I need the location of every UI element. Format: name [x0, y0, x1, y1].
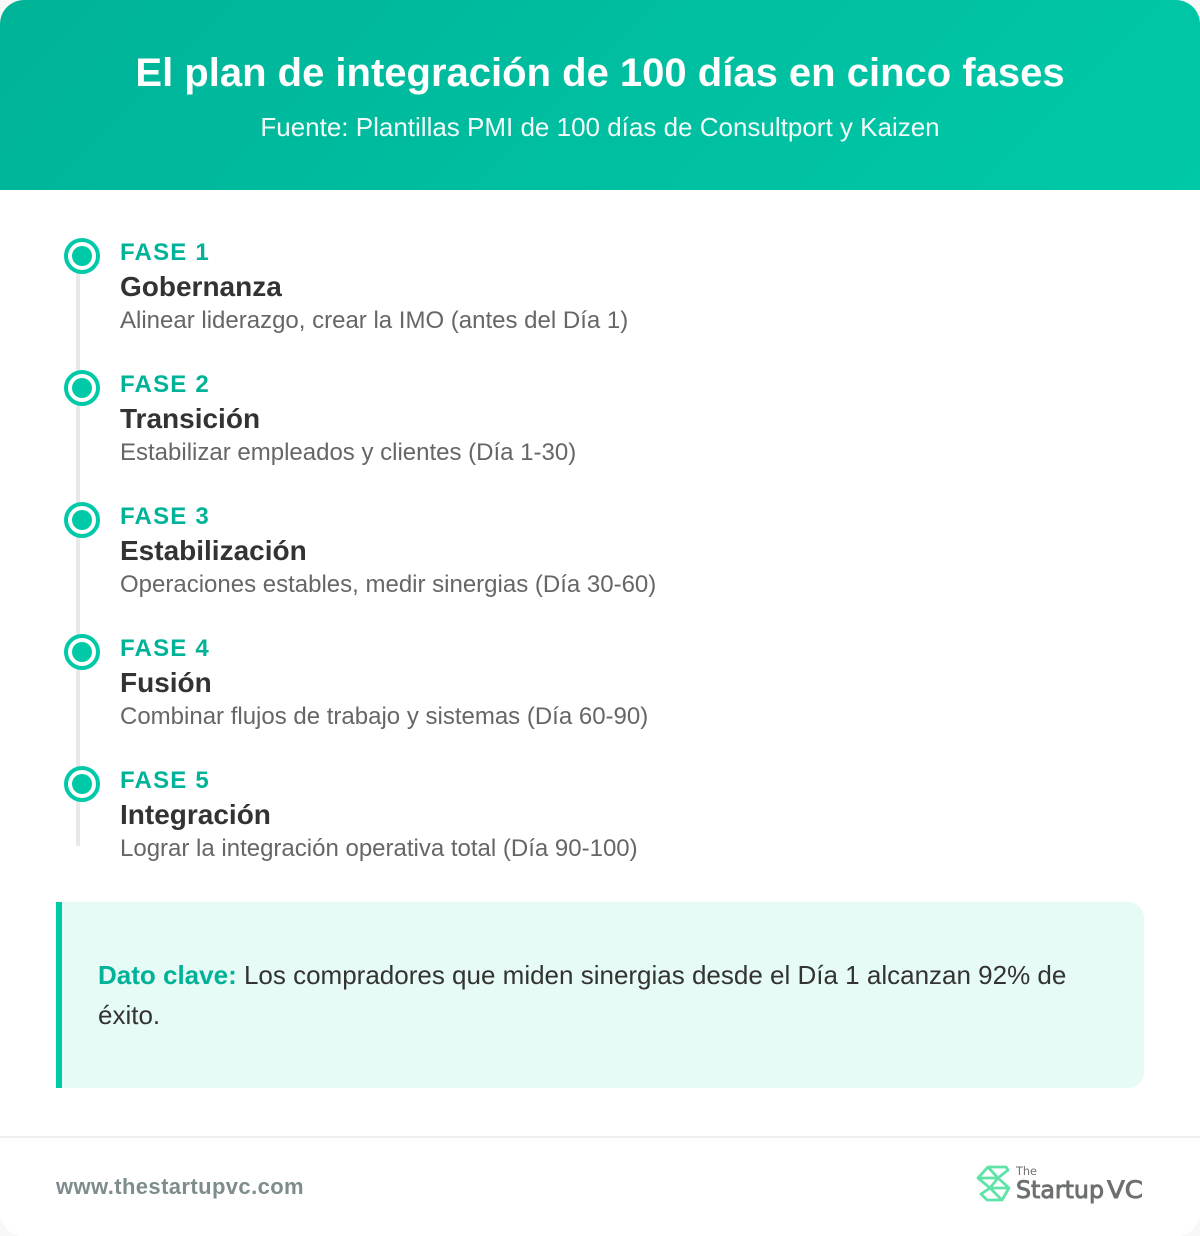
logo wordmark: VC	[1107, 1176, 1143, 1204]
logo wordmark: Startup	[1016, 1176, 1104, 1204]
title: El plan de integración de 100 días en cinco fases	[135, 51, 1065, 95]
phase 5 label: FASE 5	[120, 767, 210, 794]
source subtitle: Fuente: Plantillas PMI de 100 días de Consultport y Kaizen	[260, 112, 940, 142]
phase 1 description: Alinear liderazgo, crear la IMO (antes del Día 1)	[120, 307, 628, 334]
phase 3 name: Estabilización	[120, 535, 307, 566]
callout: key fact	[56, 902, 1144, 1088]
icon: timeline dot 2	[64, 370, 100, 406]
logo wordmark: The	[1015, 1164, 1037, 1178]
logo: The Startup VC	[976, 1164, 1143, 1204]
icon: timeline dot 3	[64, 502, 100, 538]
callout: key fact: Dato clave: Los compradores que miden sinergias desde el Día 1 alcanzan 92% de éxito.	[98, 960, 1066, 1030]
phase 1 label: FASE 1	[120, 239, 210, 266]
phase 2	[64, 370, 576, 466]
phase 3 label: FASE 3	[120, 503, 210, 530]
phase 4 label: FASE 4	[120, 635, 210, 662]
icon: timeline dot 1	[64, 238, 100, 274]
logo wordmark	[1015, 1164, 1143, 1204]
phase 4 description: Combinar flujos de trabajo y sistemas (Día 60-90)	[120, 703, 648, 730]
phase 4	[64, 634, 648, 730]
website url: www.thestartupvc.com	[56, 1174, 304, 1199]
phase 5	[64, 766, 638, 862]
phase 3	[64, 502, 656, 598]
timeline connector line	[76, 256, 80, 846]
phase 2 name: Transición	[120, 403, 260, 434]
phase 4 name: Fusión	[120, 667, 212, 698]
phase 5 description: Lograr la integración operativa total (Día 90-100)	[120, 835, 638, 862]
phase 3 description: Operaciones estables, medir sinergias (Día 30-60)	[120, 571, 656, 598]
phase 2 label: FASE 2	[120, 371, 210, 398]
icon: timeline dot 5	[64, 766, 100, 802]
phase 1 name: Gobernanza	[120, 271, 282, 302]
phase 5 name: Integración	[120, 799, 271, 830]
footer	[0, 1136, 1200, 1236]
header banner	[0, 0, 1200, 190]
icon: timeline dot 4	[64, 634, 100, 670]
phase 1	[64, 238, 628, 334]
icon: logo mark	[978, 1167, 1009, 1200]
phase 2 description: Estabilizar empleados y clientes (Día 1-30)	[120, 439, 576, 466]
